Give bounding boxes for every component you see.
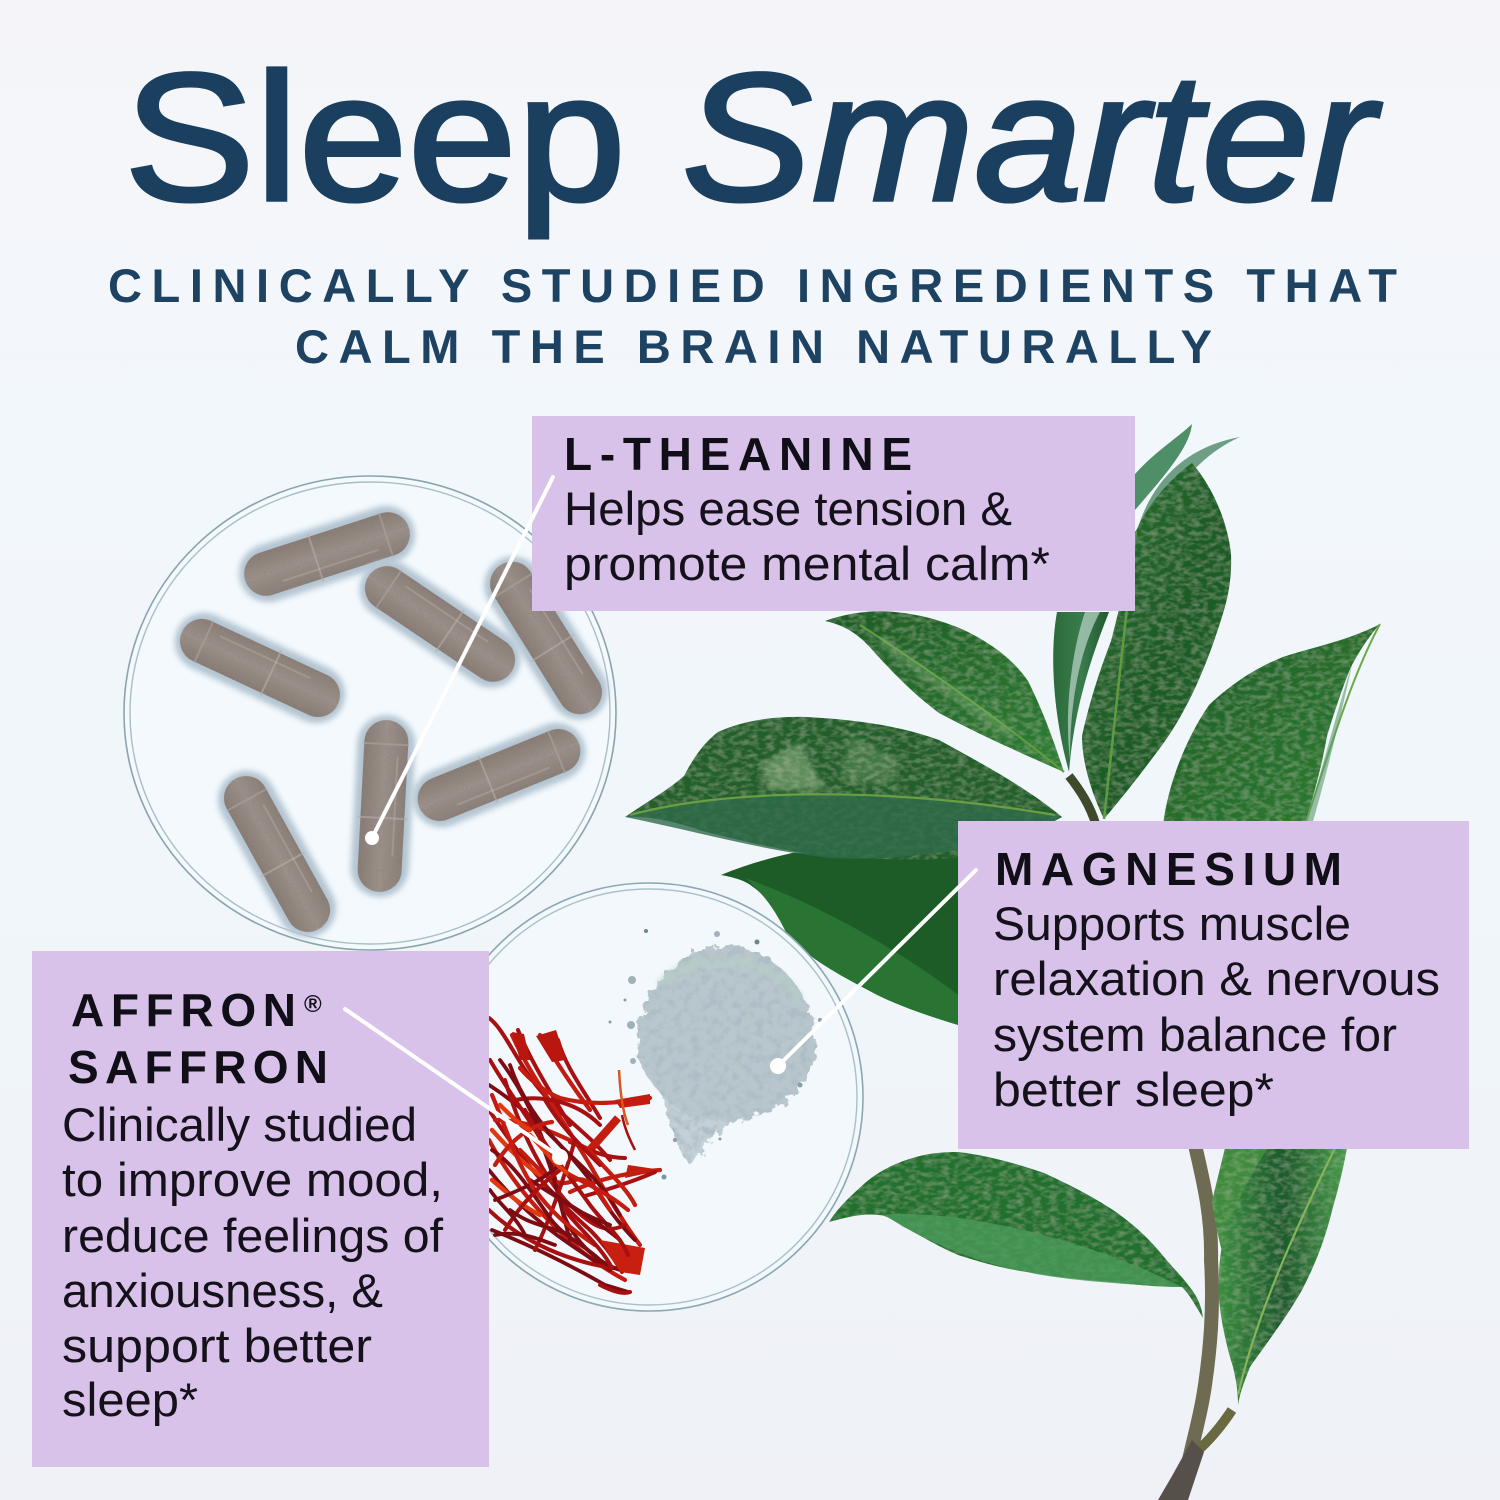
title: Smarter — [682, 35, 1382, 239]
upper stem — [1069, 776, 1096, 825]
text block: L-Theanine description: Helps ease tension & — [564, 482, 1012, 535]
connector: Magnesium to powder — [770, 870, 976, 1074]
subtitle: CALM THE BRAIN NATURALLY — [295, 320, 1212, 373]
text block: Affron Saffron description — [62, 1098, 444, 1426]
capsule — [348, 549, 532, 699]
side branch — [1196, 1410, 1232, 1452]
petri dish with saffron and powder — [489, 882, 864, 1312]
text block: Magnesium description: relaxation & nervous — [993, 952, 1440, 1005]
text block: Affron Saffron description: reduce feelings of — [62, 1209, 444, 1262]
small top leaves — [1130, 424, 1240, 560]
panel: Affron Saffron — [32, 951, 489, 1467]
magnesium powder — [608, 929, 822, 1180]
text block: Affron Saffron description: anxiousness, & — [62, 1264, 383, 1317]
big left leaf — [625, 717, 1062, 860]
panel: L-Theanine — [532, 416, 1135, 611]
capsule — [349, 714, 417, 898]
heading: Affron Saffron — [68, 984, 328, 1093]
right leaf — [1163, 624, 1380, 825]
lower right leaf — [1219, 1148, 1347, 1405]
capsule — [404, 714, 594, 836]
text block: Magnesium description — [993, 897, 1440, 1116]
saffron threads — [489, 1018, 662, 1293]
heading: L-Theanine: L-THEANINE — [564, 428, 912, 480]
capsule — [165, 603, 355, 733]
capsule — [231, 498, 423, 610]
petri dish with capsules — [124, 476, 619, 950]
text block: Affron Saffron description: to improve mood, — [62, 1153, 443, 1206]
text block: L-Theanine description — [564, 482, 1050, 590]
text block: Magnesium description: system balance for — [993, 1008, 1397, 1061]
back lower leaf — [1212, 1148, 1278, 1255]
title: Sleep — [124, 35, 626, 239]
title — [124, 35, 1382, 239]
subtitle: CLINICALLY STUDIED INGREDIENTS THAT — [108, 259, 1397, 312]
lower stem — [1178, 1145, 1212, 1500]
connector: Affron to saffron — [345, 1009, 568, 1165]
text block: Magnesium description: Supports muscle — [993, 897, 1351, 950]
text block: Magnesium description: better sleep* — [993, 1063, 1274, 1116]
bottom left leaf — [829, 1152, 1203, 1318]
capsule — [473, 545, 619, 731]
heading: Affron Saffron: SAFFRON — [68, 1041, 328, 1093]
panel: Magnesium — [958, 821, 1469, 1149]
heading: Affron Saffron: AFFRON — [71, 984, 296, 1036]
stem node — [1158, 1440, 1204, 1500]
capsule — [208, 760, 346, 948]
text block: Affron Saffron description: Clinically studied — [62, 1098, 417, 1151]
subtitle — [108, 259, 1397, 373]
connector: L-Theanine to capsule — [365, 477, 553, 845]
text block: Affron Saffron description: sleep* — [62, 1373, 198, 1426]
tall leaf — [1082, 463, 1231, 819]
heading: Affron Saffron: ® — [304, 991, 322, 1018]
upper-left leaf — [825, 611, 1064, 772]
plant with leaves — [625, 424, 1380, 1500]
narrow leaf — [1053, 612, 1109, 772]
heading: Magnesium: MAGNESIUM — [995, 843, 1342, 895]
lower hidden leaf — [721, 850, 965, 1027]
text block: L-Theanine description: promote mental calm* — [564, 537, 1050, 590]
text block: Affron Saffron description: support better — [62, 1319, 372, 1372]
